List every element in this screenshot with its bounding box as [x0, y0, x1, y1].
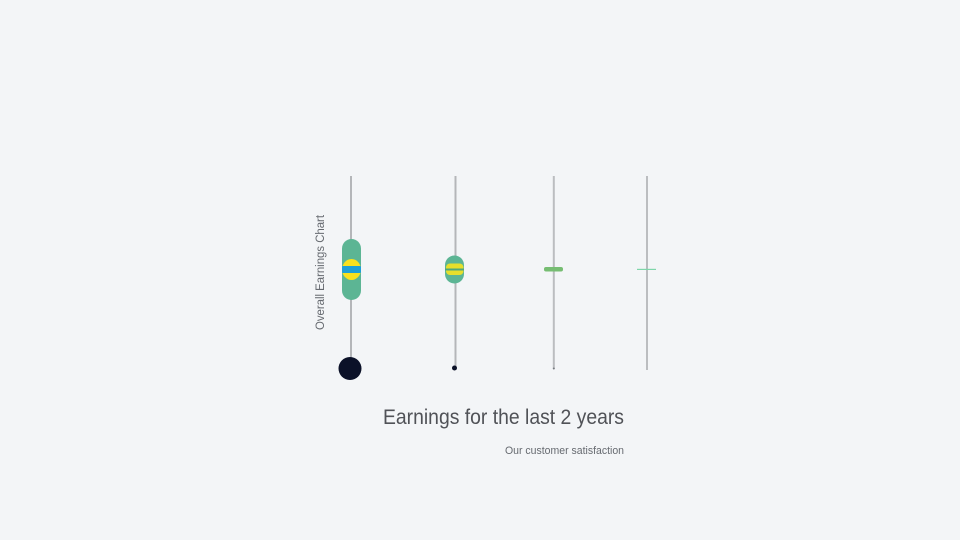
column 1 yellow circle: [342, 259, 361, 280]
subtitle: Our customer satisfaction: [505, 445, 624, 457]
column 2 navy dot: [452, 366, 457, 370]
column 1 navy dot: [338, 357, 362, 380]
column 2 green capsule: [445, 256, 464, 284]
column 3: [544, 176, 563, 370]
column 4 track: [646, 176, 648, 370]
column 3 green marker: [544, 267, 563, 272]
column 1 blue band: [342, 266, 361, 273]
column 2 track: [454, 176, 456, 370]
column 3 track: [553, 176, 555, 369]
column 1 track: [350, 176, 352, 370]
column 2: [445, 176, 464, 370]
column 2 yellow band: [446, 264, 464, 275]
chart: overall earnings: [315, 176, 656, 380]
title: Earnings for the last 2 years: [383, 405, 624, 429]
column 1 green capsule: [342, 239, 361, 300]
column 2 green stripe: [445, 268, 464, 270]
column 4 green tick: [637, 269, 656, 270]
column 1: [338, 176, 362, 380]
column 4: [637, 176, 656, 370]
column 3 small dot: [553, 368, 555, 370]
axis label: Overall Earnings Chart: [315, 214, 327, 330]
